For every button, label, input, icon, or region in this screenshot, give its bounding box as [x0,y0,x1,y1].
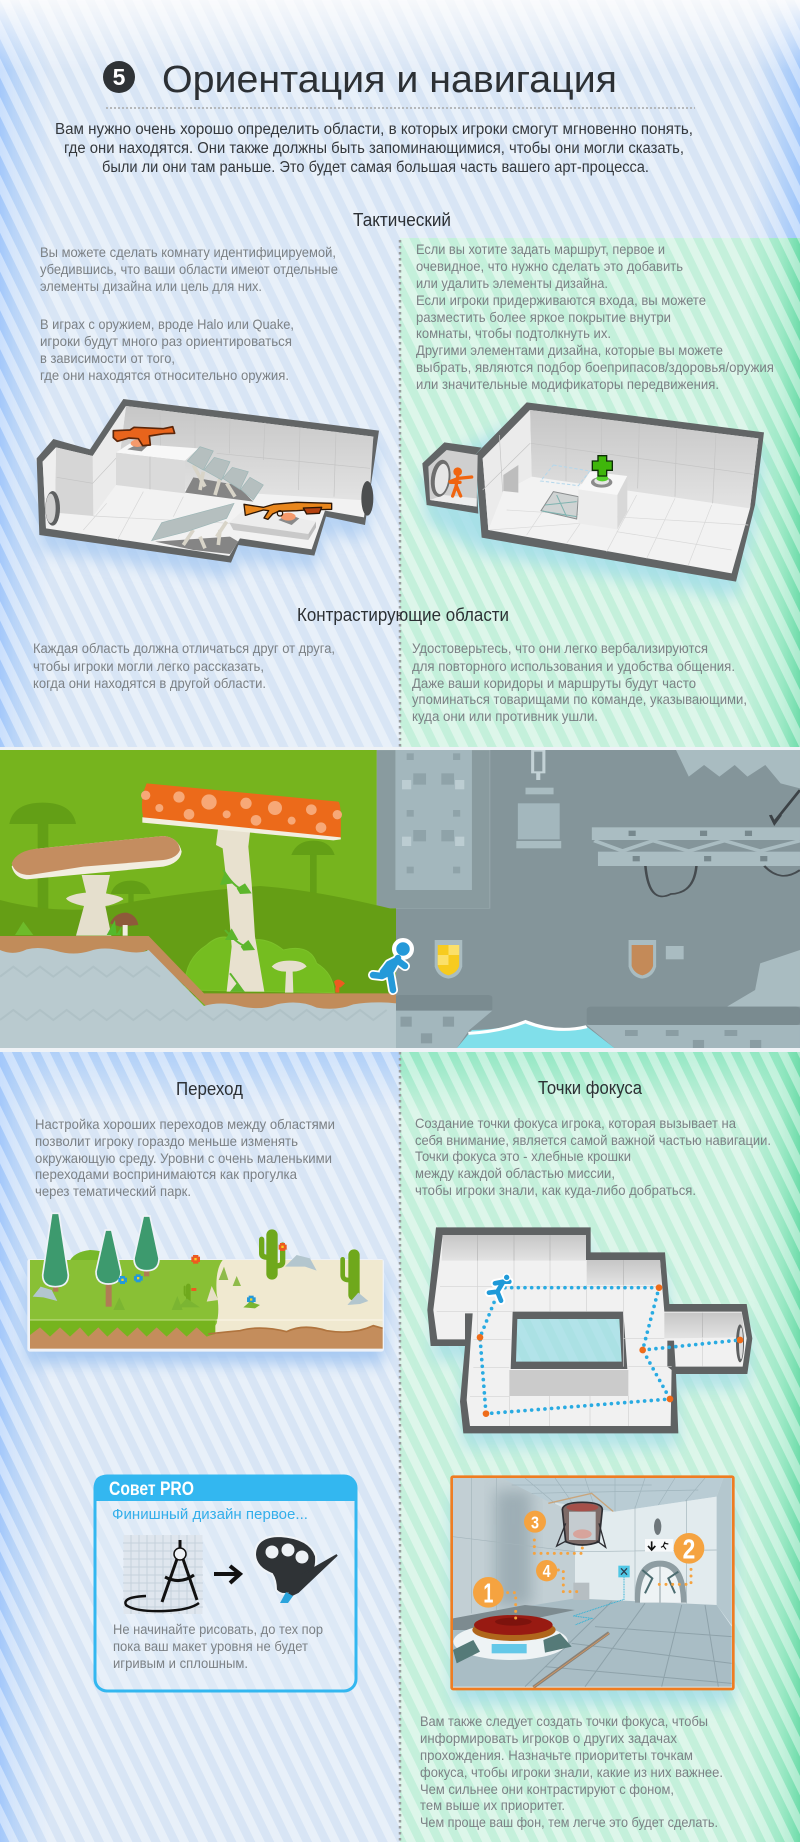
callout: pro tip [94,1475,356,1691]
text block: tactical left: В играх с оружием, вроде Halo или Quake, [40,316,294,332]
screenshot: focal points in game [452,1477,733,1703]
icon: rifle pickup [113,427,175,446]
flowers [118,1243,287,1304]
callout title: Совет PRO [109,1479,194,1500]
heading: focal points: Точки фокуса [538,1078,643,1098]
heading: tactical: Тактический [353,210,451,230]
text block: tactical left: элементы дизайна или цель для них. [40,278,262,294]
text block: focal points: себя внимание, является самой важной частью навигации. [415,1132,771,1148]
illustration: forest to desert landscape [27,1213,384,1363]
marker 3: 3 [531,1512,539,1532]
marker 4 [536,1560,557,1581]
callout text: Не начинайте рисовать, до тех пор [113,1621,323,1637]
text block: transition: переходами воспринимаются как прогулка [35,1166,297,1182]
text block: contrast right: упоминаться товарищами по команде, указывающими, [412,691,747,707]
focal point markers [477,1284,743,1417]
text block: transition [35,1116,335,1199]
text block: contrast right [412,640,747,724]
text block: tactical right: разместить более яркое покрытие внутри [416,309,671,325]
text block: tactical left: Вы можете сделать комнату идентифицируемой, [40,244,336,260]
intro text: Вам нужно очень хорошо определить области, в которых игроки смогут мгновенно понять, [55,121,693,138]
text block: tactical right: или удалить элементы дизайна. [416,275,608,291]
intro text [55,121,693,176]
text block: focal point priorities: Чем проще ваш фон, тем легче это будет сделать. [420,1814,718,1830]
icon: runner [489,1274,510,1301]
scene: green forest [0,750,396,1048]
text block: focal point priorities: фокуса, чтобы игроки знали, какие из них важнее. [420,1764,723,1780]
icon: brown shield [629,940,656,979]
text block: tactical right: выбрать, являются подбор боеприпасов/здоровья/оружия [416,359,774,375]
text block: tactical left: убедившись, что ваши области имеют отдельные [40,261,338,277]
heading: contrasting areas: Контрастирующие области [297,605,509,625]
text block: contrast left: Каждая область должна отличаться друг от друга, [33,640,335,656]
icon: yellow shield [435,940,462,979]
callout text: пока ваш макет уровня не будет [113,1638,309,1654]
text block: tactical right: Если игроки придерживаются входа, вы можете [416,292,706,308]
text block: tactical right: или значительные модификаторы передвижения. [416,376,719,392]
icon: compass on graph paper [123,1535,203,1614]
rocks [33,1255,368,1305]
marker 2: 2 [683,1534,695,1565]
text block: tactical left: игроки будут много раз ориентироваться [40,333,292,349]
scene: grey fortress [377,750,800,1048]
focal routes [508,1540,691,1621]
icon: number badge 5 [103,61,135,93]
text block: tactical left: где они находятся относительно оружия. [40,367,289,383]
marker 3 [524,1511,546,1533]
text block: focal point priorities: Чем сильнее они контрастируют с фоном, [420,1781,674,1797]
text block: contrast left [33,640,335,691]
text block: tactical right [416,241,774,392]
pod [557,1502,606,1547]
text block: focal points: Создание точки фокуса игрока, которая вызывает на [415,1115,736,1131]
cacti [185,1235,354,1302]
title: Ориентация и навигация [162,59,617,101]
text block: tactical right: очевидное, что нужно сделать это добавить [416,258,683,274]
portal button [453,1615,572,1663]
trees [43,1213,159,1307]
icon: arrow [214,1566,240,1583]
icon: running figure [373,943,409,990]
icon: number badge 5: 5 [113,64,126,90]
text block: tactical left [40,244,338,383]
icon: orange soldier [450,469,472,496]
brown mushroom [12,836,182,936]
text block: focal points: Точки фокуса это - хлебные крошки [415,1148,631,1164]
marker 1 [473,1577,504,1609]
signs [645,1518,673,1552]
text block: contrast right: Удостоверьтесь, что они легко вербализируются [412,640,708,656]
icon: palette and brush [255,1536,337,1603]
callout subtitle: Финишный дизайн первое... [112,1506,308,1523]
text block: focal point priorities: Вам также следует создать точки фокуса, чтобы [420,1713,708,1729]
callout header [94,1475,356,1501]
banner: game scene contrast [0,750,800,1048]
text block: tactical right: Если вы хотите задать маршрут, первое и [416,241,665,257]
marker 1: 1 [483,1578,493,1609]
text block: focal points: между каждой областью миссии, [415,1165,615,1181]
door [635,1561,686,1603]
icon: green plus [592,456,612,476]
route: dotted path [480,1288,740,1414]
callout text [113,1621,323,1671]
text block: focal point priorities: информировать игроков о других задачах [420,1730,677,1746]
text block: focal point priorities: тем выше их приоритет. [420,1797,565,1813]
room: weapons level [37,399,379,578]
orange mushroom [141,783,342,992]
icon: door [736,1324,744,1362]
text block: tactical right: комнаты, чтобы подтолкнуть их. [416,325,611,341]
text block: focal point priorities [420,1713,723,1830]
text block: transition: через тематический парк. [35,1183,191,1199]
text block: contrast left: когда они находятся в другой области. [33,675,266,691]
room: health pickup level [422,402,764,598]
text block: contrast right: для повторного использования и удобства общения. [412,658,735,674]
heading: transition: Переход [176,1079,243,1099]
intro text: где они находятся. Они также должны быть запоминающимися, чтобы они могли сказать, [64,140,684,157]
sign: x marker [573,1566,630,1625]
text block: contrast left: чтобы игроки могли легко рассказать, [33,658,264,674]
callout text: игривым и сплошным. [113,1655,248,1671]
illustration: focal points map [427,1227,752,1447]
marker 2 [674,1533,704,1565]
text block: tactical left: в зависимости от того, [40,350,175,366]
text block: transition: окружающую среду. Уровни с очень маленькими [35,1150,332,1166]
text block: transition: Настройка хороших переходов между областями [35,1116,335,1132]
text block: focal points: чтобы игроки знали, как куда-либо добраться. [415,1182,696,1198]
intro text: были ли они там раньше. Это будет самая большая часть вашего арт-процесса. [102,159,649,176]
text block: tactical right: Другими элементами дизайна, которые вы можете [416,342,723,358]
text block: focal points [415,1115,771,1198]
text block: transition: позволит игроку гораздо меньше изменять [35,1133,298,1149]
text block: contrast right: Даже ваши коридоры и маршруты будут часто [412,675,696,691]
text block: focal point priorities: прохождения. Назначьте приоритеты точкам [420,1747,693,1763]
text block: contrast right: куда они или противник ушли. [412,708,598,724]
marker 4: 4 [543,1561,551,1581]
icon: shotgun pickup [244,502,332,519]
